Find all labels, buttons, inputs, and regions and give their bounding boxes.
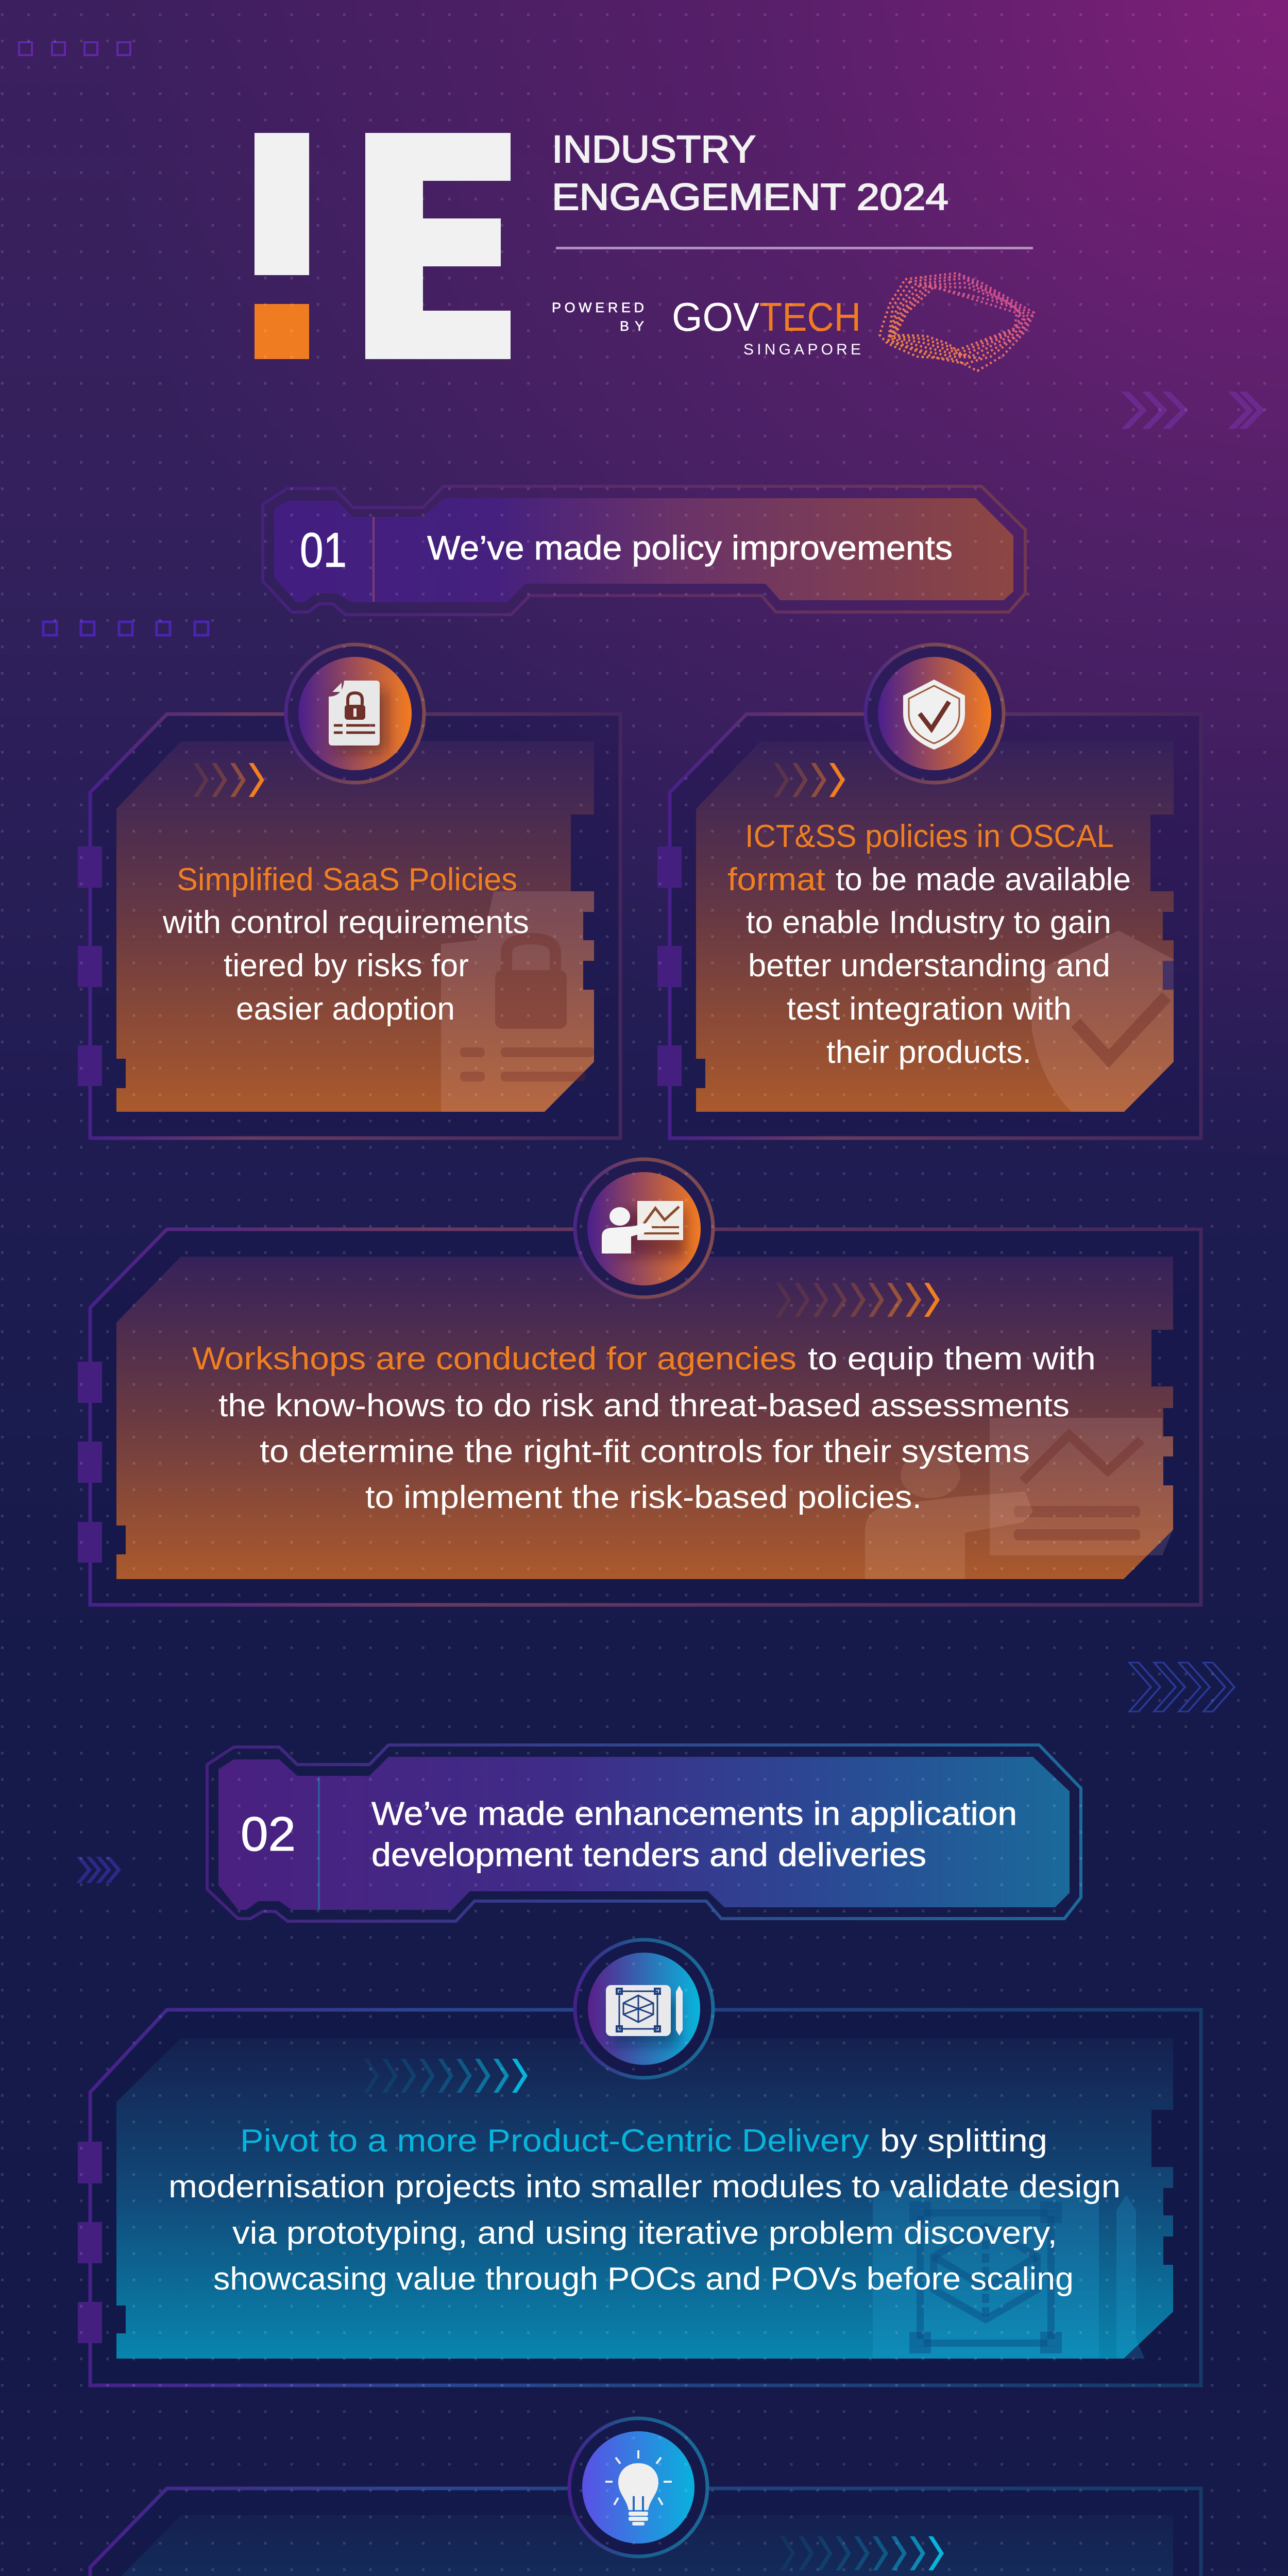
text: workshops: Workshops are conducted for agencies [192,1341,796,1377]
decorative squares left of cards [43,622,208,635]
text: ICT&SS policies: format [727,862,825,897]
text: simplified SaaS policies: Simplified SaaS Policies [177,862,517,897]
logo title: ENGAGEMENT 2024 [552,177,948,218]
text: ICT&SS policies: better understanding and [748,948,1110,984]
text: simplified SaaS policies: easier adoption [236,991,455,1027]
logo divider [556,247,1033,249]
text: product-centric delivery: Pivot to a more Product-Centric Delivery [240,2123,869,2159]
powered by GovTech [552,294,861,358]
powered by GovTech: TECH [759,294,861,340]
panel: ICT&SS policies [657,645,1201,1138]
section 02 heading: 02 [241,1807,296,1861]
decorative chevrons section 2 right [1129,1663,1234,1711]
section 02 heading: We’ve made enhancements in application [371,1795,1017,1832]
panel: agile bulk tender [78,2418,1201,2576]
text: product-centric delivery: showcasing value through POCs and POVs before scaling [213,2261,1074,2297]
powered by GovTech: GOV [672,294,759,340]
decorative chevrons section 2 left [76,1857,121,1883]
icon: blueprint [575,1940,713,2078]
section 01 heading: 01 [300,523,347,578]
logo: IE mark [255,133,511,359]
text: simplified SaaS policies: with control requirements [162,905,529,940]
watermark: shield [1030,930,1174,1112]
text: workshops: to implement the risk-based policies. [365,1480,922,1515]
text: ICT&SS policies [727,819,1131,1070]
watermark: blueprint [873,2191,1145,2359]
panel: workshops [78,1159,1201,1605]
decorative chevrons top right [1121,392,1265,429]
watermark: locked document [441,891,594,1112]
icon: locked document [286,645,424,783]
powered by GovTech: BY [620,318,644,334]
logo: dotted ribbon [879,273,1034,371]
decorative squares top left [19,42,130,55]
text: workshops: to equip them with [808,1341,1096,1377]
chevrons [774,763,845,797]
text: workshops [192,1341,1096,1515]
section 02 heading: development tenders and deliveries [371,1836,926,1873]
text: simplified SaaS policies [162,862,529,1027]
text: ICT&SS policies: to be made available [836,862,1131,897]
chevrons [364,2059,528,2093]
text: workshops: the know-hows to do risk and threat-based assessments [218,1388,1070,1423]
chevrons [193,763,264,797]
text: ICT&SS policies: test integration with [787,991,1072,1027]
text: ICT&SS policies: their products. [826,1035,1031,1070]
section 01 heading [263,486,1025,615]
logo title [552,128,948,218]
powered by GovTech: POWERED [552,300,644,315]
watermark: presenter [865,1418,1173,1579]
text: product-centric delivery: by splitting [880,2123,1047,2159]
section 01 heading: We’ve made policy improvements [427,529,953,567]
text: product-centric delivery: modernisation projects into smaller modules to validate design [168,2169,1121,2205]
icon: light bulb [569,2418,707,2556]
icon: shield [866,645,1004,783]
text: product-centric delivery [168,2123,1121,2297]
chevrons [780,2536,944,2570]
chevrons [776,1283,940,1317]
text: simplified SaaS policies: tiered by risks for [224,948,469,984]
panel: product-centric delivery [78,1940,1201,2385]
icon: presenter [575,1159,713,1297]
logo title: INDUSTRY [552,128,756,171]
text: ICT&SS policies: to enable Industry to gain [746,905,1111,940]
section 02 heading [207,1745,1081,1921]
panel: simplified SaaS policies [78,645,620,1138]
text: ICT&SS policies: ICT&SS policies in OSCAL [745,819,1114,854]
text: workshops: to determine the right-fit controls for their systems [260,1434,1030,1469]
powered by GovTech: SINGAPORE [743,341,861,358]
text: product-centric delivery: via prototyping, and using iterative problem discovery, [232,2215,1057,2251]
